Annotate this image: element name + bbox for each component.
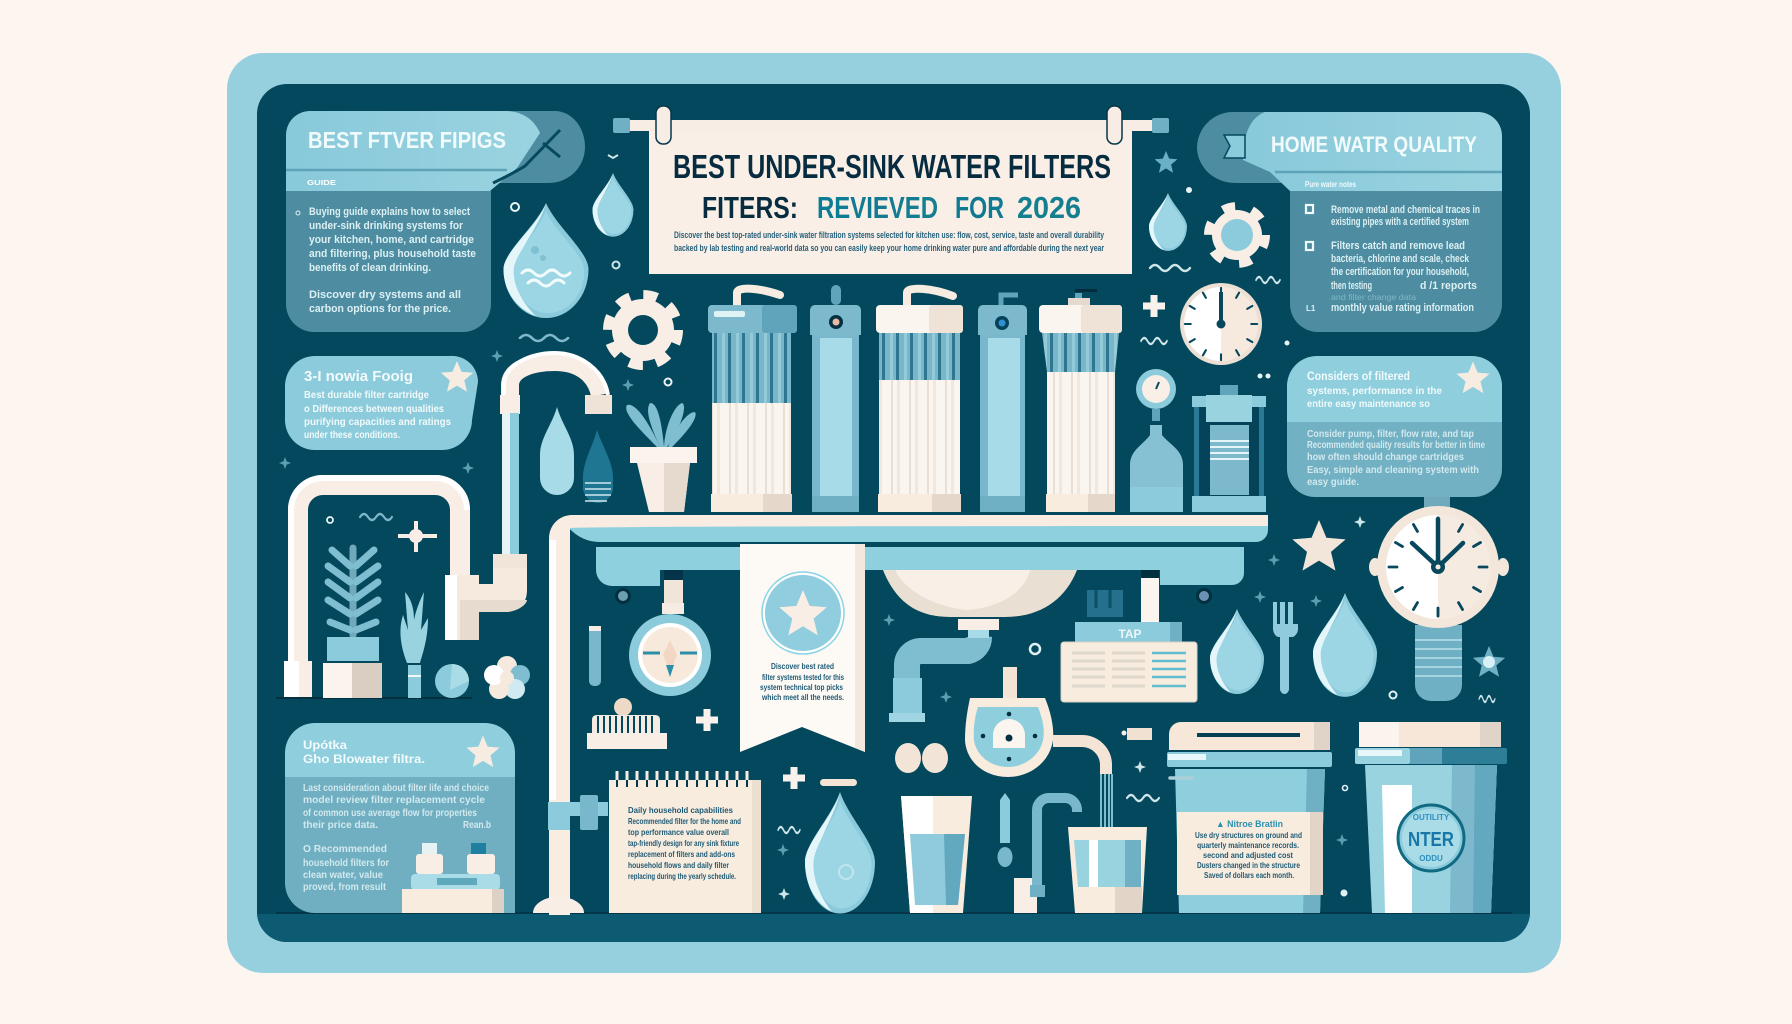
icons: upper right bbox=[1130, 151, 1290, 512]
title line 2 bbox=[702, 190, 1081, 225]
icon: blue star badge bbox=[1473, 646, 1505, 677]
panel: home water quality bbox=[1197, 112, 1502, 332]
body text: o Differences between qualities bbox=[304, 403, 444, 415]
checkboxes bbox=[1306, 205, 1313, 250]
icon: flower bbox=[484, 656, 530, 699]
label card bbox=[1177, 812, 1323, 895]
left bottom plumbing frame bbox=[276, 478, 527, 699]
body text: d /1 reports bbox=[1420, 280, 1477, 292]
body text: Remove metal and chemical traces in bbox=[1331, 204, 1480, 216]
notepad text: tap-friendly design for any sink fixture bbox=[628, 838, 739, 848]
body text: and filtering, plus household taste bbox=[309, 248, 476, 260]
pipe foot bbox=[533, 897, 584, 913]
body text: O Recommended bbox=[303, 843, 387, 855]
icon: gear bbox=[608, 295, 678, 365]
heading: systems, performance in the bbox=[1307, 385, 1442, 397]
label text: quarterly maintenance records. bbox=[1197, 840, 1299, 850]
badge star bbox=[779, 590, 827, 635]
icon: lower drop bbox=[1210, 609, 1264, 694]
panel: best filter picks bbox=[286, 111, 585, 332]
pipe connector bbox=[548, 795, 608, 830]
body text: proved, from result bbox=[303, 881, 386, 893]
body text bbox=[1307, 428, 1485, 488]
notepad text: replacing during the yearly schedule. bbox=[628, 871, 736, 881]
title line 1: BEST UNDER-SINK WATER FILTERS bbox=[673, 148, 1111, 185]
small marks bbox=[327, 514, 392, 523]
icon: fern plant bbox=[323, 548, 382, 698]
lever bbox=[1170, 776, 1192, 780]
body text: carbon options for the price. bbox=[309, 303, 451, 315]
body text: existing pipes with a certified system bbox=[1331, 216, 1469, 228]
panel: features bbox=[285, 356, 478, 450]
heading bbox=[1307, 369, 1442, 410]
strap bbox=[1415, 625, 1462, 701]
icon: plus bbox=[696, 709, 718, 731]
icon: glass under stream bbox=[1068, 827, 1147, 913]
body text: Best durable filter cartridge bbox=[304, 389, 429, 401]
small ring bbox=[1030, 644, 1040, 654]
shelf bbox=[549, 515, 1268, 915]
ribbon text: filter systems tested for this bbox=[762, 672, 844, 682]
icon: two eggs bbox=[895, 743, 948, 773]
lugs bbox=[1369, 558, 1381, 576]
ribbon award bbox=[740, 544, 865, 752]
label text: Use dry structures on ground and bbox=[1195, 830, 1302, 840]
body text: their price data. bbox=[303, 819, 378, 831]
icon: small water drop bbox=[592, 173, 634, 237]
body text bbox=[1306, 204, 1480, 314]
bucket filter with label bbox=[1167, 722, 1332, 913]
large canister with badge bbox=[1355, 722, 1507, 913]
icon: TAP panel: TAP bbox=[1118, 627, 1142, 641]
icon: cream star bbox=[1292, 520, 1346, 571]
body text bbox=[304, 389, 451, 441]
body text: L1 bbox=[1306, 304, 1316, 313]
counter bar bbox=[596, 547, 1244, 586]
body text: benefits of clean drinking. bbox=[309, 262, 431, 274]
heading: entire easy maintenance so bbox=[1307, 398, 1430, 410]
icon: brush bbox=[587, 698, 667, 749]
screw left bbox=[615, 588, 631, 604]
ribbon text bbox=[760, 661, 844, 702]
subtitle bbox=[674, 230, 1104, 253]
badge text: OUTILITY bbox=[1413, 813, 1450, 822]
icon: large water drop bbox=[504, 203, 588, 318]
icon: test tube bbox=[589, 626, 601, 686]
notepad text: Daily household capabilities bbox=[628, 805, 733, 815]
filter 2 bbox=[810, 285, 861, 512]
label text: Dusters changed in the structure bbox=[1197, 860, 1300, 870]
icon: larger lower drop bbox=[1313, 593, 1377, 697]
icon: spiky plant bbox=[400, 592, 428, 698]
body text: Last consideration about filter life and choice bbox=[303, 782, 489, 794]
body text: Recommended quality results for better in time bbox=[1307, 439, 1485, 451]
icon: valve with spout bbox=[965, 667, 1112, 827]
heading bbox=[303, 738, 425, 766]
body text: monthly value rating information bbox=[1331, 302, 1474, 314]
icon: potted plant bbox=[626, 403, 697, 512]
icon: water drop bbox=[1149, 193, 1187, 251]
heading: Considers of filtered bbox=[1307, 369, 1410, 383]
junction elbow bbox=[445, 568, 527, 640]
screw right bbox=[1196, 588, 1212, 604]
icon: big bottom drop bbox=[805, 792, 875, 914]
body text: model review filter replacement cycle bbox=[303, 794, 485, 806]
squiggles and sparkles bbox=[777, 614, 1159, 900]
body text: Filters catch and remove lead bbox=[1331, 240, 1465, 252]
star icon bbox=[466, 736, 500, 767]
bullet bbox=[296, 211, 300, 215]
ribbon text: Discover best rated bbox=[771, 661, 834, 671]
star icon bbox=[1456, 362, 1490, 393]
title line 2: FITERS: bbox=[702, 190, 798, 225]
body text: bacteria, chlorine and scale, check bbox=[1331, 253, 1470, 265]
icon: small tap bbox=[1014, 798, 1077, 913]
notepad text: household flows and daily filter bbox=[628, 860, 730, 870]
filter 1 bbox=[708, 289, 797, 512]
label text: second and adjusted cost bbox=[1203, 850, 1293, 860]
arch pipe bbox=[298, 485, 460, 662]
icon: gear with blue centre bbox=[1210, 208, 1264, 262]
body text: under these conditions. bbox=[304, 429, 400, 441]
badge text: NTER bbox=[1408, 829, 1454, 851]
body text: Rean.b bbox=[463, 819, 491, 831]
icon: wall clock bbox=[1180, 283, 1262, 365]
icon: TAP panel bbox=[1061, 570, 1197, 702]
filter 3 bbox=[876, 289, 963, 512]
title line 2: 2026 bbox=[1017, 190, 1081, 225]
heading: Gho Blowater filtra. bbox=[303, 752, 425, 766]
body text: Buying guide explains how to select bbox=[309, 206, 470, 218]
body text: Discover dry systems and all bbox=[309, 289, 461, 301]
body text bbox=[309, 206, 476, 315]
label text: Saved of dollars each month. bbox=[1204, 870, 1294, 880]
banner card bbox=[649, 131, 1132, 274]
decorative squiggle left bbox=[520, 335, 568, 341]
notepad text: Recommended filter for the home and bbox=[628, 816, 741, 826]
foot bbox=[284, 661, 312, 698]
icon: plus bbox=[1143, 295, 1165, 317]
mini filter unit bbox=[402, 843, 504, 913]
icon: filter housing bbox=[1192, 385, 1266, 512]
icon: dropper bbox=[998, 793, 1012, 867]
small part bbox=[1122, 728, 1152, 740]
panel: under-sink water filters bbox=[285, 723, 515, 913]
heading: BEST FTVER FIPIGS bbox=[308, 127, 506, 153]
icon: sparkle cross bbox=[398, 521, 437, 552]
icon: dark drop with lines bbox=[583, 430, 613, 503]
body text: easy guide. bbox=[1307, 476, 1359, 488]
filter cartridges bbox=[708, 285, 1122, 512]
notepad text: replacement of filters and add-ons bbox=[628, 849, 735, 859]
body text: household filters for bbox=[303, 857, 389, 869]
icon: plus bbox=[783, 767, 805, 789]
icon: small star bbox=[1155, 151, 1177, 173]
filter 5 bbox=[1039, 289, 1122, 512]
small label: Pure water notes bbox=[1305, 180, 1356, 189]
heading: HOME WATR QUALITY bbox=[1271, 132, 1477, 157]
rod bbox=[613, 106, 1169, 144]
body text: your kitchen, home, and cartridge bbox=[309, 234, 474, 246]
heading: Upótka bbox=[303, 738, 347, 752]
icon: tall pale drop bbox=[540, 407, 574, 495]
small markers bbox=[279, 155, 672, 474]
drain pipe bbox=[889, 630, 989, 722]
ribbon text: system technical top picks bbox=[760, 682, 843, 692]
sink basin bbox=[883, 570, 1077, 630]
body text bbox=[303, 782, 491, 893]
inner dark panel bbox=[257, 84, 1530, 942]
body text: the certification for your household, bbox=[1331, 266, 1469, 278]
small marks right bbox=[1254, 516, 1495, 896]
label text bbox=[1195, 819, 1302, 880]
body text: under-sink drinking systems for bbox=[309, 220, 464, 232]
icon: gauge bottle bbox=[1130, 369, 1183, 512]
icon: minus bbox=[820, 779, 857, 786]
subtitle: backed by lab testing and real-world data so you can easily keep your home drinking water pure and affordable during the next year bbox=[674, 243, 1104, 253]
subtitle: Discover the best top-rated under-sink water filtration systems selected for kitchen use: flow, cost, service, taste and overall durability bbox=[674, 230, 1104, 240]
small label: GUIDE bbox=[307, 180, 336, 187]
body text: of common use average flow for properties bbox=[303, 807, 477, 819]
filter 4 bbox=[978, 295, 1027, 512]
ribbon text: which meet all the needs. bbox=[761, 692, 844, 702]
panel: considerations bbox=[1287, 356, 1502, 514]
badge bbox=[1398, 805, 1464, 871]
floor line bbox=[276, 697, 472, 699]
ribbon tail bbox=[1224, 135, 1245, 158]
title line 2: REVIEVED bbox=[817, 190, 938, 225]
heading: 3-I nowia Fooig bbox=[304, 368, 413, 385]
icon: water glass bbox=[901, 796, 972, 913]
icon: dial gauge bbox=[629, 570, 711, 696]
icon: ball bbox=[435, 664, 469, 698]
badge text bbox=[1408, 813, 1454, 863]
title line 2: FOR bbox=[955, 190, 1004, 225]
body text: how often should change cartridges bbox=[1307, 451, 1464, 463]
label text: ▲ Nitroe Bratlin bbox=[1216, 819, 1283, 829]
sink shelf and pipe bbox=[533, 515, 1268, 915]
title banner bbox=[613, 106, 1169, 274]
shelf light band bbox=[567, 526, 1268, 542]
body text: purifying capacities and ratings bbox=[304, 416, 451, 428]
star icon bbox=[441, 361, 473, 392]
notepad text: top performance value overall bbox=[628, 827, 729, 837]
notepad text bbox=[628, 805, 741, 881]
badge text: ODDU bbox=[1419, 854, 1443, 863]
badge bbox=[762, 572, 844, 654]
body text: Easy, simple and cleaning system with bbox=[1307, 464, 1479, 476]
body text: and filter change data bbox=[1331, 293, 1417, 302]
icon: wrist-style clock bbox=[1369, 506, 1509, 701]
water stream bbox=[1101, 774, 1112, 827]
icon: fork bbox=[1273, 602, 1298, 694]
small markers bbox=[1186, 187, 1290, 378]
body text: clean water, value bbox=[303, 869, 383, 881]
faucet pipe bbox=[500, 353, 612, 554]
squiggles bbox=[1141, 265, 1280, 344]
body text: Consider pump, filter, flow rate, and tap bbox=[1307, 428, 1474, 440]
body text: then testing bbox=[1331, 280, 1372, 292]
icon: notepad bbox=[609, 771, 761, 913]
outer light blue frame bbox=[227, 53, 1561, 973]
